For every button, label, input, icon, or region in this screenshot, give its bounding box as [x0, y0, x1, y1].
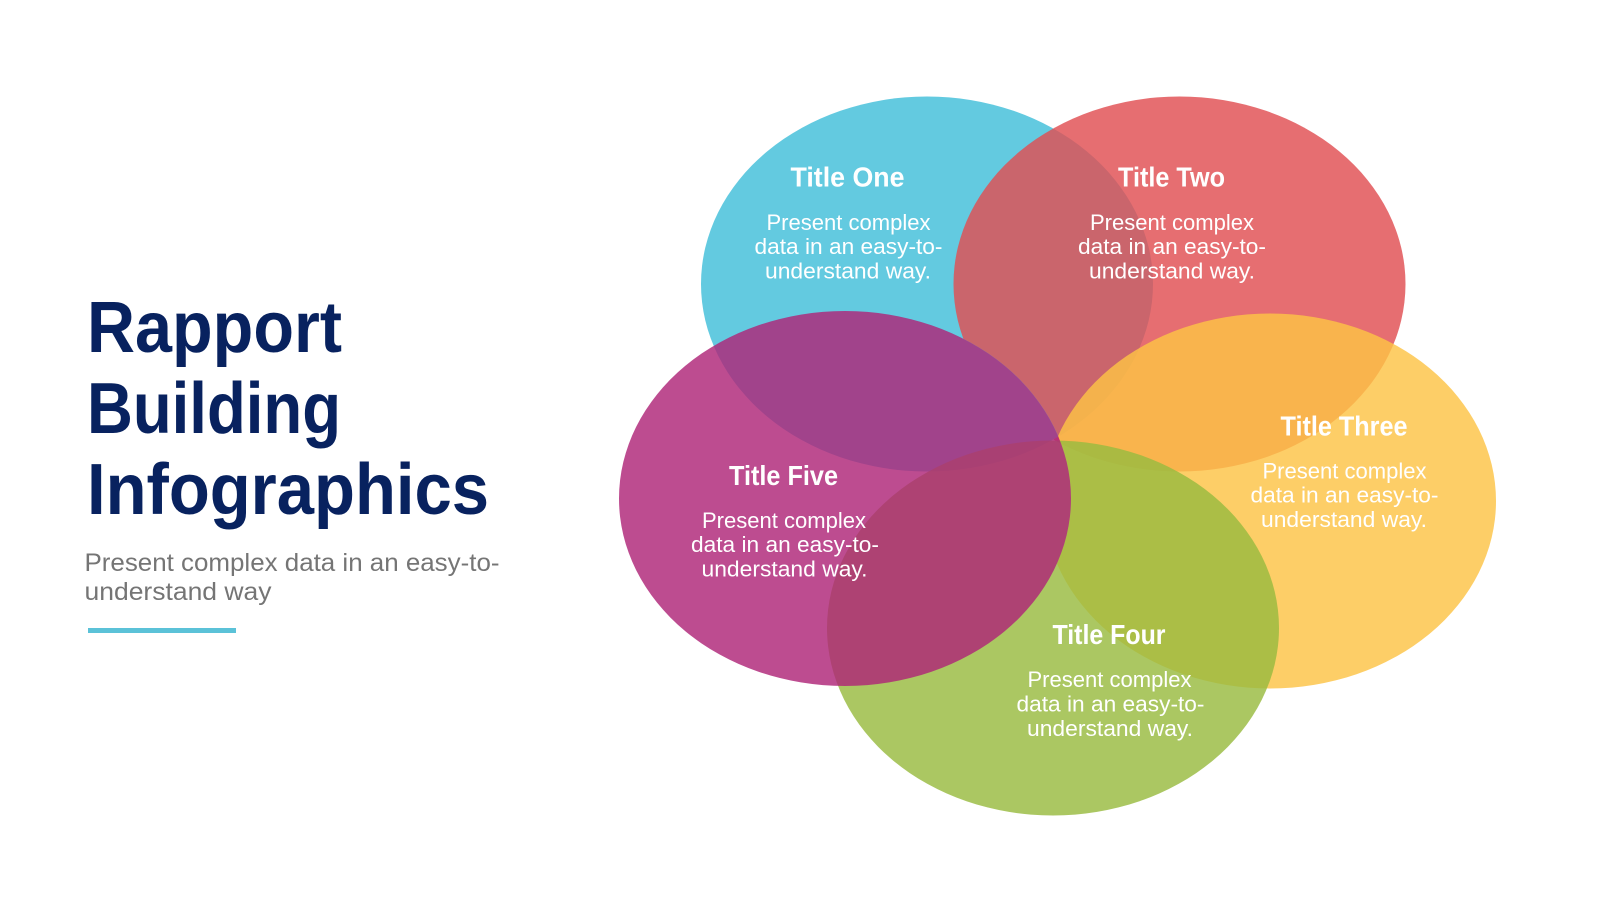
circle: two: [954, 96, 1406, 472]
text block: title three: understand way.: [1261, 507, 1427, 532]
text block: title four: Title Four: [1052, 619, 1166, 650]
text block: title four: Present complex: [1028, 667, 1192, 692]
text block: title two: understand way.: [1089, 258, 1255, 284]
venn diagram: [619, 96, 1496, 816]
text block: title one: [754, 162, 942, 284]
title: Infographics: [87, 450, 489, 530]
text block: title three: [1250, 410, 1438, 532]
text block: title five: understand way.: [702, 556, 868, 582]
text block: title two: Present complex: [1090, 210, 1254, 235]
text block: title two: Title Two: [1118, 162, 1225, 192]
text block: title three: Present complex: [1262, 458, 1426, 484]
text block: title two: [1078, 162, 1266, 284]
subtitle: understand way: [84, 578, 272, 606]
text block: title five: Title Five: [729, 460, 838, 491]
text block: title four: understand way.: [1027, 716, 1193, 741]
circle: four: [827, 440, 1279, 816]
text block: title three: Title Three: [1280, 410, 1408, 442]
text block: title one: understand way.: [765, 258, 931, 284]
circle: five: [619, 311, 1071, 686]
text block: title five: data in an easy-to-: [691, 532, 879, 557]
text block: title four: [1016, 619, 1204, 741]
text block: title five: Present complex: [702, 508, 866, 533]
title: Building: [87, 369, 341, 449]
circle: one: [701, 96, 1153, 472]
accent underline: [88, 628, 236, 633]
text block: title five: [691, 460, 879, 582]
text block: title four: data in an easy-to-: [1016, 692, 1204, 716]
text block: title one: data in an easy-to-: [754, 234, 942, 259]
title: Rapport: [87, 288, 342, 368]
text block: title one: Present complex: [766, 210, 930, 235]
title: [87, 288, 489, 530]
circle: three: [1044, 314, 1496, 688]
text block: title three: data in an easy-to-: [1250, 482, 1438, 508]
text block: title two: data in an easy-to-: [1078, 234, 1266, 259]
subtitle: [84, 549, 500, 606]
subtitle: Present complex data in an easy-to-: [84, 549, 500, 577]
text block: title one: Title One: [790, 162, 904, 192]
